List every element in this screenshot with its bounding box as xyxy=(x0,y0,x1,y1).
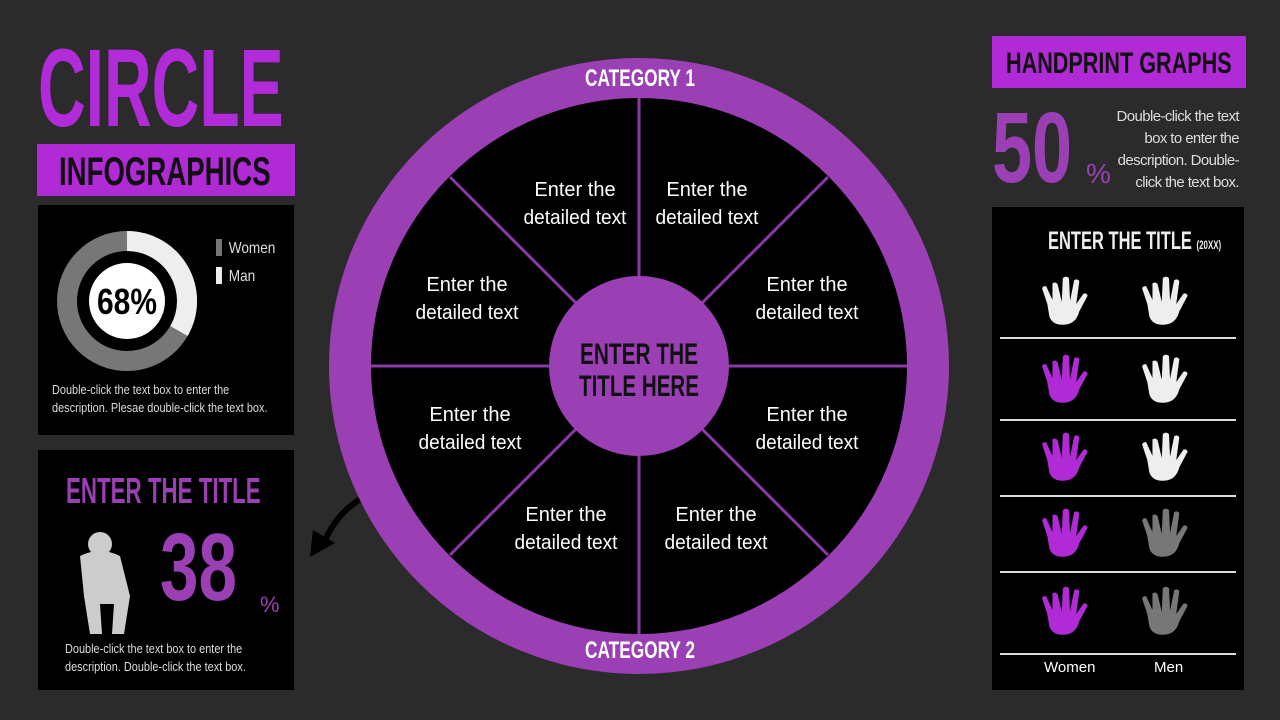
segment texts: detailed text xyxy=(664,532,768,554)
category labels: CATEGORY 1 xyxy=(585,65,695,92)
stat 50%: 50 xyxy=(992,92,1072,204)
segment texts: Enter the xyxy=(426,274,508,296)
panel: handprints: Men xyxy=(1154,659,1183,676)
segment texts: detailed text xyxy=(656,207,759,229)
segment texts: detailed text xyxy=(756,432,859,454)
handprint rows xyxy=(1000,276,1236,655)
banner: HANDPRINT GRAPHS: HANDPRINT GRAPHS xyxy=(1006,47,1232,80)
description: description. Plesae double-click the text box. xyxy=(52,400,267,415)
segment texts: Enter the xyxy=(429,404,511,426)
spokes xyxy=(371,98,907,634)
subtitle banner: INFOGRAPHICS: INFOGRAPHICS xyxy=(59,150,271,194)
center circle xyxy=(549,276,729,456)
segment texts: detailed text xyxy=(416,302,519,324)
segment texts: Enter the xyxy=(675,504,757,526)
panel: 38% xyxy=(38,450,294,690)
description: Double-click the text box to enter the xyxy=(52,382,229,397)
segment texts: detailed text xyxy=(756,302,859,324)
segment texts: Enter the xyxy=(766,274,848,296)
icon: crouching person xyxy=(80,532,130,634)
description xyxy=(52,382,267,415)
ring xyxy=(329,58,949,674)
legend xyxy=(216,239,275,285)
legend: Women xyxy=(229,240,275,257)
legend: Man xyxy=(229,268,255,285)
panel: handprints xyxy=(992,207,1244,690)
wheel xyxy=(329,58,949,674)
title: CIRCLE: CIRCLE xyxy=(38,27,284,150)
number 38%: 38 xyxy=(160,514,237,621)
axis labels: Women xyxy=(1044,659,1095,676)
description: Double-click the text box to enter the xyxy=(65,641,242,656)
description: Double-click the text box to enter the description. Double-click the text box. xyxy=(1117,108,1239,191)
panel: donut chart xyxy=(38,205,294,435)
segment texts: Enter the xyxy=(534,179,616,201)
category labels xyxy=(585,65,695,664)
segment texts: Enter the xyxy=(525,504,607,526)
heading: ENTER THE TITLE (20XX) xyxy=(1048,227,1221,255)
banner: HANDPRINT GRAPHS xyxy=(992,36,1246,88)
subtitle banner: INFOGRAPHICS xyxy=(37,144,295,196)
segment texts: Enter the xyxy=(666,179,748,201)
description: description. Double-click the text box. xyxy=(65,659,246,674)
text: % xyxy=(1086,158,1111,189)
heading: ENTER THE TITLE xyxy=(66,470,261,511)
category labels: CATEGORY 2 xyxy=(585,637,695,664)
donut chart 68%: 68% xyxy=(97,281,157,322)
arrow xyxy=(310,496,361,557)
segment texts xyxy=(416,179,859,554)
segment texts: detailed text xyxy=(514,532,618,554)
segment texts: detailed text xyxy=(418,432,522,454)
center circle: ENTER THE xyxy=(580,338,698,371)
segment texts: Enter the xyxy=(766,404,848,426)
segment texts: detailed text xyxy=(524,207,627,229)
panel: 38%: % xyxy=(260,592,280,617)
center circle: TITLE HERE xyxy=(579,370,699,403)
donut chart 68% xyxy=(57,231,198,371)
description xyxy=(65,641,246,674)
